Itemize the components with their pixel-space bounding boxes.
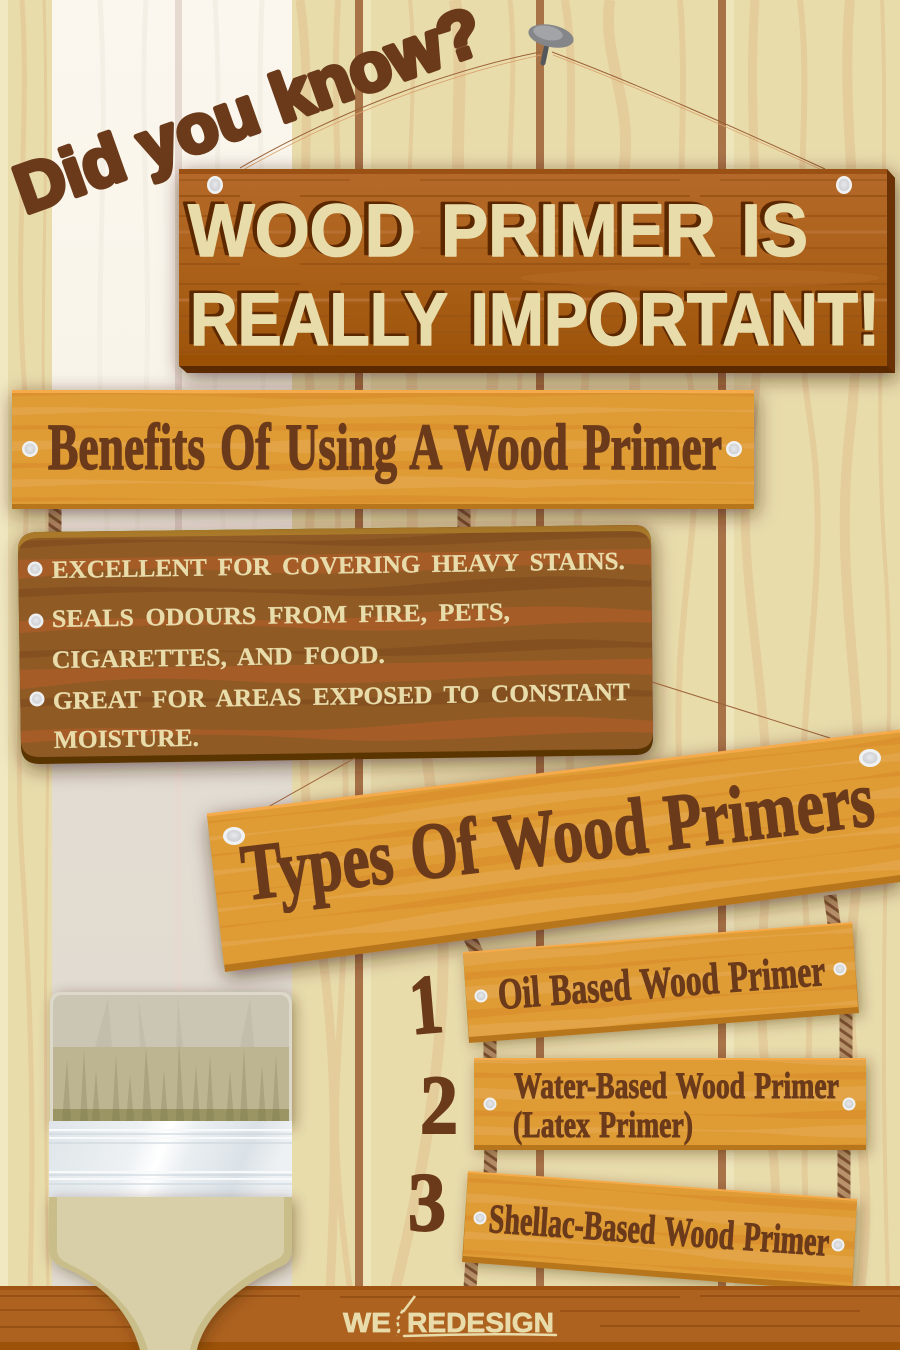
logo: we redesign: REDESIGN xyxy=(407,1307,554,1338)
rope segments behind benefits xyxy=(55,505,464,535)
rope segments for types list xyxy=(470,895,846,1288)
plank 3: shellac based primer xyxy=(462,1172,857,1292)
plank 1: oil based primer xyxy=(463,923,859,1043)
hanging wires for types sign xyxy=(268,682,830,807)
icon: paint brush xyxy=(49,992,292,1350)
benefits list text: CIGARETTES, AND FOOD. xyxy=(52,642,385,674)
nails xyxy=(484,1098,856,1110)
label: (Latex Primer) xyxy=(513,1105,693,1146)
nails on title sign xyxy=(207,176,852,194)
small text: Did you know?: Did you know? xyxy=(5,0,492,228)
panel: benefits list board xyxy=(18,525,653,764)
bullet nails xyxy=(28,562,44,706)
numbers 1 2 3 xyxy=(406,957,458,1249)
benefits list text: MOISTURE. xyxy=(54,725,199,754)
nail and hanging wire for title sign xyxy=(240,20,825,170)
benefits list text: EXCELLENT FOR COVERING HEAVY STAINS. xyxy=(52,548,625,584)
nails xyxy=(223,749,881,845)
bristles xyxy=(50,992,292,1125)
panel: types heading plank xyxy=(207,731,900,972)
numbers 1 2 3: 2 xyxy=(420,1059,458,1152)
title text: WOOD PRIMER IS xyxy=(184,187,804,270)
plank 2: water based primer xyxy=(474,1058,866,1150)
benefits list text: GREAT FOR AREAS EXPOSED TO CONSTANT xyxy=(53,679,630,715)
benefits list text xyxy=(52,548,630,754)
benefits list text: SEALS ODOURS FROM FIRE, PETS, xyxy=(52,599,510,633)
title text xyxy=(184,187,880,361)
title sign xyxy=(179,169,895,373)
nails xyxy=(22,441,742,457)
handle xyxy=(49,1197,292,1350)
label xyxy=(513,1066,839,1146)
nails xyxy=(474,1212,844,1252)
ferrule xyxy=(49,1121,292,1197)
panel: benefits heading plank xyxy=(12,390,754,509)
numbers 1 2 3: 1 xyxy=(406,957,447,1053)
logo: we redesign: WE xyxy=(343,1307,391,1338)
nails xyxy=(474,962,846,1002)
footer wood bar xyxy=(0,1286,900,1350)
logo: we redesign xyxy=(343,1296,556,1338)
title text: WOOD PRIMER IS xyxy=(188,189,808,272)
numbers 1 2 3: 3 xyxy=(408,1156,446,1249)
